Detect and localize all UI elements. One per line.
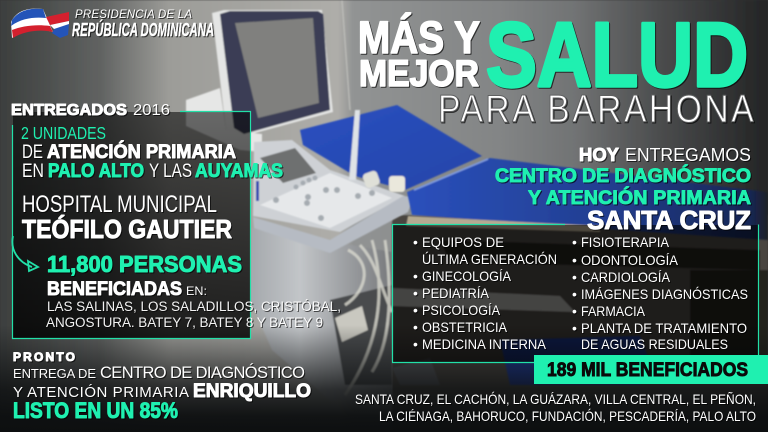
text: hoy entregamos: ENTREGAMOS [625,145,751,165]
examination table [300,105,768,385]
block: hoy entregamos [495,145,751,235]
table: seat cushion [407,158,768,240]
background: right wall shade [500,0,768,240]
text: palo alto y las auyamas [22,160,283,182]
list: services column 1: • [413,234,418,250]
list: services column 2: • [572,320,577,336]
table: fold line [414,159,488,190]
arrow [12,236,38,271]
machine: monitor housing [212,10,333,136]
machine: monitor frame [220,11,330,134]
list: services column 2: IMÁGENES DIAGNÓSTICAS [581,286,748,302]
list: services column 1: PEDIATRÍA [422,285,490,301]
machine: cart body [250,228,392,400]
machine: probes [362,170,381,189]
text: hospital municipal: HOSPITAL MUNICIPAL [22,191,217,218]
list: services column 1: • [413,285,418,301]
list: services column 1: PSICOLOGÍA [422,302,501,318]
list: services column 2: PLANTA DE TRATAMIENTO [581,320,747,336]
machine: console top [253,140,405,232]
background: floor under table [392,215,768,432]
left dark panel [13,112,250,338]
machine: console tray [253,196,414,253]
table: side rail [392,358,440,385]
text: localities: LAS SALINAS, LOS SALADILLOS, CRISTÓBAL, [47,299,341,314]
list: services column 1: • [413,268,418,284]
list: services column 2: • [572,286,577,302]
text: listo en un 85%: LISTO EN UN 85% [13,398,178,423]
panel border [392,224,758,362]
title: para barahona: PARA BARAHONA [438,87,754,131]
table: back cushion [300,105,482,190]
list: services column 1: ÚLTIMA GENERACIÓN [422,251,557,267]
icon: Dominican flag [11,9,69,38]
heading: entregados: ENTREGADOS [11,102,127,119]
text: localities [46,299,341,330]
logo: presidencia: PRESIDENCIA DE LA [75,9,192,21]
list: services column 2 [572,234,748,352]
list: services column 2: • [572,252,577,268]
text: centro de diagnostico: CENTRO DE DIAGNÓSTICO [495,163,751,187]
list: services column 2: • [572,303,577,319]
text: pronto: PRONTO [13,350,75,364]
panel: services [392,224,758,362]
list: services column 1: EQUIPOS DE [422,234,504,250]
block: pronto enriquillo [13,350,311,423]
background: wall corner [342,0,350,110]
list: services column 2: FISIOTERAPIA [581,234,670,250]
heading: entregados: 2016 [133,102,170,119]
list: services column 2: ODONTOLOGÍA [581,252,679,268]
machine: dark cart recess [330,285,392,385]
right dark panel [393,225,758,362]
machine: monitor stand [186,88,262,152]
text: beneficiadas en: BENEFICIADAS [47,278,182,300]
text: palo alto y las auyamas: Y LAS [149,160,192,182]
text: beneficiadas en: EN: [186,284,207,298]
text: atencion primaria enriquillo [13,381,311,402]
machine: blue pen [256,181,259,201]
ultrasound machine [186,10,414,400]
list: services column 2: • [572,269,577,285]
text: santa cruz: SANTA CRUZ [587,205,751,235]
text: entrega de centro: ENTREGA DE [13,366,96,381]
machine: keypad buttons [273,176,375,221]
title [358,5,754,131]
list: services column 1: OBSTETRICIA [422,319,508,335]
machine: monitor screen [235,18,319,118]
machine: cable tangle [345,240,392,395]
text: teofilo gautier: TEÓFILO GAUTIER [22,214,232,244]
list: services column 1: MEDICINA INTERNA [422,336,547,352]
logo [11,9,214,40]
list: services column 1: • [413,336,418,352]
list: services column 1 [413,234,557,352]
list: services column 1: • [413,319,418,335]
table: lower cushion [500,336,650,385]
title: mas y: MÁS Y [358,12,480,63]
text: entrega de centro [13,363,305,382]
panel border [12,112,250,338]
machine: console screen [260,148,316,183]
panel: entregados 2016 [11,102,341,338]
list: services column 2: • [572,234,577,250]
text: hoy entregamos: HOY [579,145,619,165]
machine: drawer highlights [335,306,368,342]
machine: console keypad [260,173,392,228]
text: beneficiary localities [355,391,756,424]
table: beige underside [406,216,600,232]
list: services column 1: GINECOLOGÍA [422,268,512,284]
list: services column 2: DE AGUAS RESIDUALES [581,336,728,352]
text: palo alto y las auyamas: AUYAMAS [195,160,283,182]
text: entrega de centro: CENTRO DE DIAGNÓSTICO [100,363,305,382]
list: services column 1: • [413,302,418,318]
title: mejor: MEJOR [359,53,479,94]
logo: republica dominicana: REPÚBLICA DOMINICANA [72,19,214,40]
text: atencion primaria: DE [22,141,43,163]
text: 11,800 personas: 11,800 PERSONAS [47,251,242,277]
callout: 189 mil beneficiados: 189 MIL BENEFICIADOS [547,359,748,381]
dark bottom fade [0,325,768,432]
text: palo alto y las auyamas: EN [22,160,44,182]
text: atencion primaria enriquillo: ENRIQUILLO [193,381,311,402]
list: services column 2: CARDIOLOGÍA [581,269,671,285]
text: palo alto y las auyamas: PALO ALTO [48,160,144,182]
text: localities: ANGOSTURA. BATEY 7, BATEY 8 Y BATEY 9 [46,315,323,330]
text: atencion primaria: ATENCIÓN PRIMARIA [47,139,236,163]
list: services column 2: FARMACIA [581,303,646,319]
text: y atencion primaria: Y ATENCIÓN PRIMARIA [528,185,751,209]
text: 2 unidades: 2 UNIDADES [21,123,106,143]
background: floor stripes [392,288,575,312]
machine: pole [349,110,360,180]
text: atencion primaria enriquillo: Y ATENCIÓN PRIMARIA [13,384,189,401]
